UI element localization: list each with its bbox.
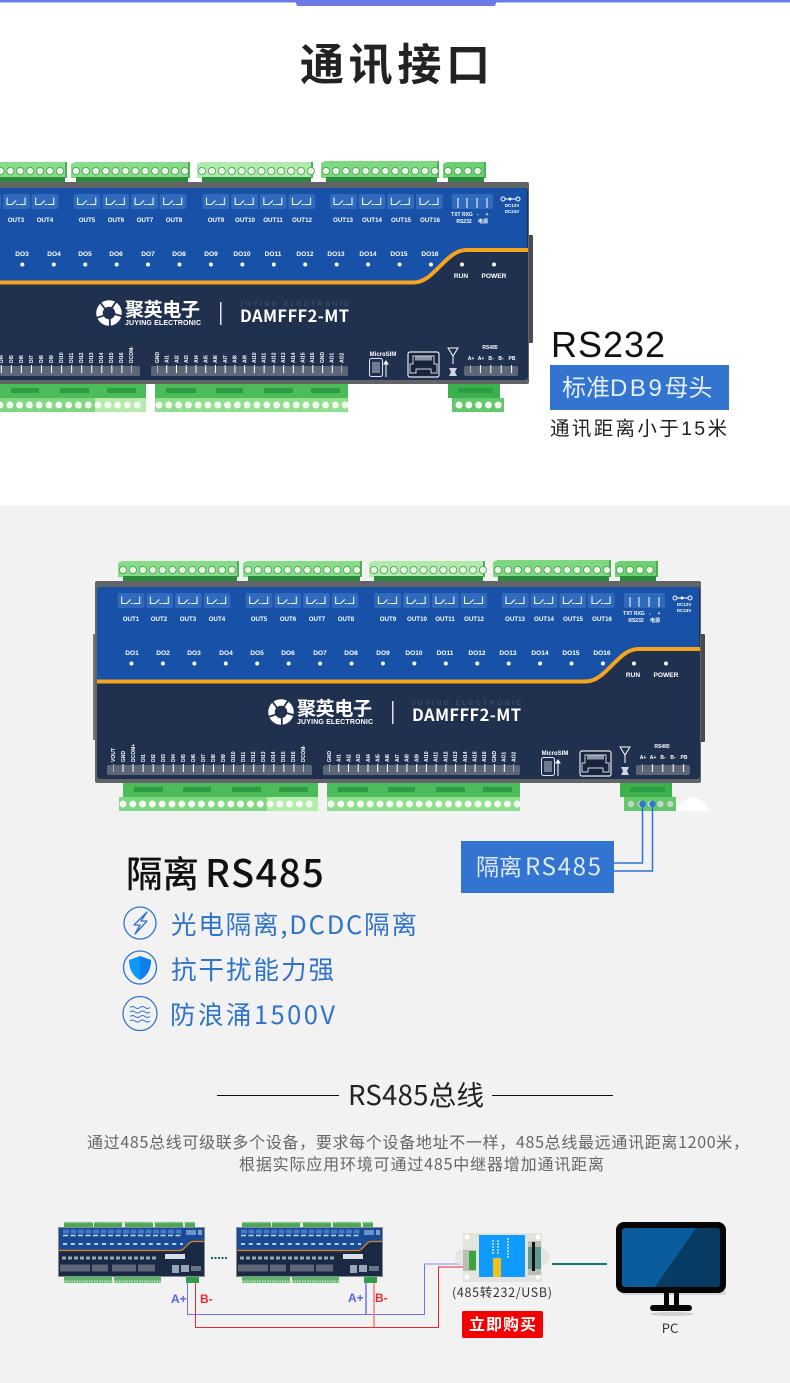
- OUT labels: [123, 616, 613, 623]
- OUT labels: OUT10: [407, 616, 428, 623]
- model name: DAMFFF2-MT: [412, 702, 521, 726]
- bus labels: [171, 1291, 388, 1306]
- RS485 terminal labels: PB: [509, 356, 516, 362]
- OUT labels: OUT4: [209, 616, 226, 623]
- analog pin bar: AI4: [194, 355, 200, 363]
- RUN and POWER indicators: POWER: [654, 672, 679, 679]
- input pin bar: VOUT: [111, 748, 117, 762]
- RS232 and power port box: 电源: [650, 617, 660, 624]
- DO labels and LEDs: DO13: [327, 251, 345, 258]
- OUT labels: OUT10: [235, 217, 256, 224]
- DO labels and LEDs: DO3: [187, 650, 201, 657]
- input pin bar: DI16: [119, 352, 125, 363]
- RS485 terminal labels: RS485: [654, 744, 670, 750]
- model name: JUYING ELECTRONIC: [240, 301, 349, 308]
- RS485 bus description: 根据实际应用环境可通过485中继器增加通讯距离: [239, 1151, 604, 1175]
- MicroSIM slot: [370, 352, 396, 377]
- input pin bar: DI4: [171, 754, 177, 762]
- analog pin bar: AI14: [463, 751, 469, 762]
- analog pin bar: AI8: [405, 754, 411, 762]
- input pin bar: DI14: [271, 751, 277, 762]
- OUT labels: OUT1: [123, 616, 140, 623]
- DO labels and LEDs: DO7: [313, 650, 327, 657]
- RS485 terminal labels: [636, 744, 690, 775]
- logo: JUYING ELECTRONIC: [297, 719, 373, 726]
- DO labels and LEDs: DO10: [233, 251, 251, 258]
- MicroSIM slot: MicroSIM: [542, 751, 568, 757]
- input pin bar: [107, 744, 312, 775]
- logo: JUYING ELECTRONIC: [125, 320, 201, 327]
- OUT labels: OUT2: [151, 616, 168, 623]
- DO labels and LEDs: DO15: [390, 251, 408, 258]
- OUT labels: OUT7: [309, 616, 326, 623]
- OUT labels: OUT6: [280, 616, 297, 623]
- RS232 and power port box: +: [658, 611, 661, 617]
- input pin bar: DI15: [109, 352, 115, 363]
- DO labels and LEDs: DO4: [219, 650, 233, 657]
- input pin bar: DI9: [221, 754, 227, 762]
- input pin bar: DI8: [39, 355, 45, 363]
- logo: [265, 694, 373, 729]
- dark lower panel: [97, 587, 700, 779]
- housing: [0, 182, 529, 384]
- input pin bar: DI8: [211, 754, 217, 762]
- bottom terminals: [0, 384, 504, 412]
- input pin bar: DCOM+: [131, 744, 137, 762]
- top accent bar: [0, 0, 790, 6]
- analog pin bar: AI5: [204, 355, 210, 363]
- RS485 bus description: 通过485总线可级联多个设备，要求每个设备地址不一样，485总线最远通讯距离1200米，: [87, 1129, 749, 1153]
- analog pin bar: AI15: [472, 751, 478, 762]
- DO labels and LEDs: DO8: [344, 650, 358, 657]
- analog pin bar: AI3: [184, 355, 190, 363]
- OUT labels: OUT7: [137, 217, 154, 224]
- DO labels and LEDs: DO14: [359, 251, 377, 258]
- analog pin bar: AI5: [376, 754, 382, 762]
- analog pin bar: AI10: [252, 352, 258, 363]
- analog pin bar: AI1: [165, 355, 171, 363]
- RS232 and power port box: [623, 593, 665, 624]
- input pin bar: DI15: [281, 751, 287, 762]
- analog pin bar: GND: [327, 750, 333, 762]
- mini device 2: [236, 1222, 383, 1283]
- analog pin bar: GND: [492, 750, 498, 762]
- white highlight patch: [668, 797, 712, 811]
- feature: optoelectronic isolation: 光电隔离,DCDC隔离: [171, 905, 417, 942]
- power spec: DC24V: [505, 209, 519, 214]
- input pin bar: DI6: [191, 754, 197, 762]
- RS485 connection wires: [614, 802, 655, 871]
- converter to PC link: [552, 1263, 607, 1265]
- DO labels and LEDs: DO11: [437, 650, 454, 657]
- RS232 and power port box: RS232: [628, 618, 644, 624]
- dark lower panel: [0, 188, 528, 380]
- analog pin bar: AI15: [300, 352, 306, 363]
- input pin bar: DI7: [29, 355, 35, 363]
- power spec: DC12V: [677, 602, 691, 607]
- side tabs: [0, 235, 533, 343]
- OUT labels: OUT11: [435, 616, 455, 623]
- power spec: DC12V: [505, 203, 519, 208]
- analog pin bar: AI7: [223, 355, 229, 363]
- DO labels and LEDs: DO13: [499, 650, 517, 657]
- RS232 and power port box: RS232: [456, 219, 472, 225]
- OUT labels: OUT11: [263, 217, 283, 224]
- OUT labels: OUT12: [292, 217, 313, 224]
- RS485 terminal labels: RS485: [482, 345, 498, 351]
- analog pin bar: AI14: [291, 352, 297, 363]
- blue upper panel: [97, 587, 699, 681]
- bottom terminals: [119, 783, 676, 811]
- converter caption: (485转232/USB): [452, 1282, 552, 1301]
- isolated RS485 label box: [461, 841, 614, 893]
- OUT labels: OUT16: [420, 217, 441, 224]
- continuation dots: [211, 1257, 228, 1259]
- DO labels and LEDs: DO5: [78, 251, 92, 258]
- logo: [93, 295, 201, 330]
- input pin bar: DI2: [151, 754, 157, 762]
- input pin bar: DI5: [181, 754, 187, 762]
- analog pin bar: GND: [320, 352, 326, 363]
- OUT labels: OUT6: [108, 217, 125, 224]
- A+ bus wire: [188, 1264, 470, 1314]
- RUN and POWER indicators: [626, 662, 679, 679]
- logo icon: [265, 698, 297, 729]
- bus labels: B-: [375, 1291, 388, 1305]
- OUT labels: OUT9: [380, 616, 397, 623]
- DO labels and LEDs: DO11: [265, 251, 282, 258]
- OUT labels: OUT15: [391, 217, 412, 224]
- analog pin bar: AI11: [262, 352, 268, 363]
- analog pin bar: AO1: [330, 352, 336, 363]
- DO labels and LEDs: DO3: [15, 251, 29, 258]
- RS232 heading: RS232: [551, 324, 665, 365]
- RS485 terminal labels: A+: [478, 356, 484, 362]
- RS485 to 232/USB converter: [455, 1233, 550, 1282]
- model name: JUYING ELECTRONIC: [412, 700, 521, 707]
- ethernet port: [580, 751, 611, 776]
- input pin bar: DI11: [241, 751, 247, 762]
- panel: RS485 section: [0, 505, 790, 1383]
- DO labels and LEDs: DO10: [405, 650, 423, 657]
- RS485 terminal labels: [464, 345, 518, 376]
- OUT labels: OUT4: [37, 217, 54, 224]
- RS485 bus description: [87, 1129, 749, 1175]
- OUT labels: OUT13: [333, 217, 354, 224]
- B- bus wire: [196, 1267, 470, 1328]
- OUT labels: OUT14: [534, 616, 555, 623]
- input pin bar: DI16: [291, 751, 297, 762]
- RS232 and power port box: -: [649, 611, 651, 617]
- input pin bar: DI13: [89, 352, 95, 363]
- DO labels and LEDs: DO14: [531, 650, 549, 657]
- input pin bar: DI14: [99, 352, 105, 363]
- RS485 terminal labels: B-: [670, 755, 676, 761]
- antenna icon: [620, 747, 630, 775]
- DO labels and LEDs: DO15: [562, 650, 580, 657]
- analog pin bar: AI2: [174, 355, 180, 363]
- OUT labels: OUT8: [338, 616, 355, 623]
- analog pin bar: AI6: [385, 754, 391, 762]
- feature: surge protection: 防浪涌1500V: [170, 995, 335, 1032]
- blue upper panel: [0, 188, 527, 282]
- MicroSIM slot: [542, 751, 568, 776]
- DO labels and LEDs: DO12: [468, 650, 486, 657]
- divider: [392, 701, 394, 724]
- input pin bar: DI7: [201, 754, 207, 762]
- DO labels and LEDs: DO6: [281, 650, 295, 657]
- OUT labels: OUT16: [592, 616, 613, 623]
- OUT labels: OUT5: [79, 217, 96, 224]
- buy button: 立即购买: [469, 1311, 537, 1335]
- RS232 label box: 标准DB9母头: [562, 375, 712, 402]
- DO labels and LEDs: DO16: [593, 650, 611, 657]
- RS232 and power port box: TXT RXG: [451, 212, 473, 218]
- relay boxes: [0, 194, 444, 209]
- input pin bar: [0, 345, 140, 376]
- DO labels and LEDs: DO2: [156, 650, 170, 657]
- RUN and POWER indicators: [454, 262, 507, 280]
- MicroSIM slot: MicroSIM: [370, 352, 396, 358]
- analog pin bar: AI13: [281, 352, 287, 363]
- analog pin bar: AI8: [233, 355, 239, 363]
- RS232 and power port box: +: [486, 212, 489, 218]
- logo icon: [93, 299, 125, 330]
- RS232 and power port box: [451, 194, 493, 225]
- feature: strong anti-interference: 抗干扰能力强: [171, 950, 334, 987]
- analog pin bar: AI1: [337, 754, 343, 762]
- device: RS485 product view: [93, 560, 712, 811]
- OUT labels: OUT5: [251, 616, 268, 623]
- DO labels and LEDs: DO8: [172, 251, 186, 258]
- DO labels and LEDs: DO9: [204, 251, 218, 258]
- DO labels and LEDs: DO9: [376, 650, 390, 657]
- RS485 terminal labels: A+: [468, 356, 474, 362]
- RS485 terminal labels: A+: [640, 755, 646, 761]
- RS232 distance note: 通讯距离小于15米: [550, 418, 727, 440]
- RS485 terminal labels: A+: [650, 755, 656, 761]
- RS485 terminal labels: B-: [488, 356, 494, 362]
- housing: [95, 581, 701, 783]
- OUT labels: OUT3: [8, 217, 25, 224]
- input pin bar: DI1: [141, 754, 147, 762]
- input pin bar: DI13: [261, 751, 267, 762]
- input pin bar: DCOM-: [129, 346, 135, 363]
- analog pin bar: AO2: [339, 352, 345, 363]
- analog pin bar: GND: [155, 352, 161, 363]
- model name: DAMFFF2-MT: [240, 303, 349, 327]
- OUT labels: [0, 217, 441, 224]
- DO labels and LEDs: [125, 650, 611, 664]
- input pin bar: DI3: [161, 754, 167, 762]
- DO labels and LEDs: [0, 251, 439, 264]
- bus labels: B-: [200, 1292, 213, 1306]
- PC label: PC: [662, 1318, 678, 1337]
- input pin bar: DI9: [49, 355, 55, 363]
- divider: [220, 302, 222, 325]
- OUT labels: OUT15: [563, 616, 584, 623]
- analog pin bar: AO1: [502, 752, 508, 762]
- RS232 and power port box: TXT RXG: [623, 611, 645, 617]
- DO labels and LEDs: DO4: [47, 251, 61, 258]
- RS232 and power port box: -: [477, 212, 479, 218]
- RS485 bus heading: RS485总线: [348, 1073, 484, 1113]
- icon: lightning: [124, 907, 156, 939]
- RUN and POWER indicators: RUN: [454, 273, 468, 280]
- analog pin bar: AI6: [213, 355, 219, 363]
- logo: 聚英电子: [297, 694, 372, 721]
- relay boxes: [117, 593, 616, 608]
- input pin bar: GND: [121, 750, 127, 762]
- analog pin bar: [151, 352, 348, 376]
- OUT labels: OUT8: [166, 217, 183, 224]
- RS485 terminal labels: B-: [498, 356, 504, 362]
- analog pin bar: AI12: [271, 352, 277, 363]
- side tabs: [93, 634, 705, 742]
- RUN and POWER indicators: POWER: [482, 273, 507, 280]
- input pin bar: DI12: [79, 352, 85, 363]
- OUT labels: OUT14: [362, 217, 383, 224]
- device: RS232 product view: [0, 161, 533, 412]
- RUN and POWER indicators: RUN: [626, 672, 640, 679]
- analog pin bar: AI2: [346, 754, 352, 762]
- analog pin bar: AI9: [414, 754, 420, 762]
- DO labels and LEDs: DO6: [109, 251, 123, 258]
- OUT labels: OUT3: [180, 616, 197, 623]
- OUT labels: OUT13: [505, 616, 526, 623]
- OUT labels: OUT9: [208, 217, 225, 224]
- ethernet port: [408, 352, 439, 377]
- analog pin bar: AI11: [434, 751, 440, 762]
- isolated RS485 heading: 隔离: [126, 845, 199, 898]
- power spec: [673, 596, 692, 613]
- isolated RS485 label box: RS485: [525, 847, 603, 882]
- top terminals: [0, 161, 486, 183]
- DO labels and LEDs: DO7: [141, 251, 155, 258]
- DO labels and LEDs: DO5: [250, 650, 264, 657]
- RS485 terminal labels: B-: [660, 755, 666, 761]
- input pin bar: DI11: [69, 352, 75, 363]
- DO labels and LEDs: DO12: [296, 251, 314, 258]
- icon: waves: [123, 996, 157, 1030]
- input pin bar: DI12: [251, 751, 257, 762]
- RS485 terminal labels: PB: [681, 755, 688, 761]
- RS232 and power port box: 电源: [478, 218, 488, 225]
- antenna icon: [448, 348, 458, 376]
- power spec: DC24V: [677, 608, 691, 613]
- analog pin bar: AI12: [443, 751, 449, 762]
- RS232 label box: [550, 365, 729, 410]
- analog pin bar: AI16: [482, 751, 488, 762]
- logo: 聚英电子: [125, 295, 200, 322]
- orange stripe: [97, 649, 700, 682]
- analog pin bar: AI13: [453, 751, 459, 762]
- icon: shield: [124, 951, 156, 984]
- bus labels: A+: [348, 1291, 364, 1305]
- input pin bar: DI5: [9, 355, 15, 363]
- PC monitor icon: [616, 1222, 726, 1316]
- analog pin bar: AI7: [395, 754, 401, 762]
- mini device 1: [58, 1222, 205, 1283]
- power spec: [501, 197, 520, 214]
- input pin bar: DI10: [231, 751, 237, 762]
- analog pin bar: AI16: [310, 352, 316, 363]
- top terminals: [118, 560, 658, 582]
- input pin bar: DCOM-: [301, 745, 307, 762]
- isolated RS485 heading: RS485: [205, 843, 325, 898]
- title: 通讯接口: [300, 29, 490, 93]
- input pin bar: DI6: [19, 355, 25, 363]
- DO labels and LEDs: DO1: [125, 650, 139, 657]
- analog pin bar: AI9: [242, 355, 248, 363]
- input pin bar: DI10: [59, 352, 65, 363]
- DO labels and LEDs: DO16: [421, 251, 439, 258]
- orange stripe: [0, 250, 528, 282]
- analog pin bar: [323, 750, 520, 775]
- analog pin bar: AI10: [424, 751, 430, 762]
- analog pin bar: AO2: [511, 752, 517, 762]
- OUT labels: OUT12: [464, 616, 485, 623]
- bus labels: A+: [171, 1292, 187, 1306]
- analog pin bar: AI4: [366, 754, 372, 762]
- analog pin bar: AI3: [356, 754, 362, 762]
- isolated RS485 label box: 隔离: [476, 848, 522, 882]
